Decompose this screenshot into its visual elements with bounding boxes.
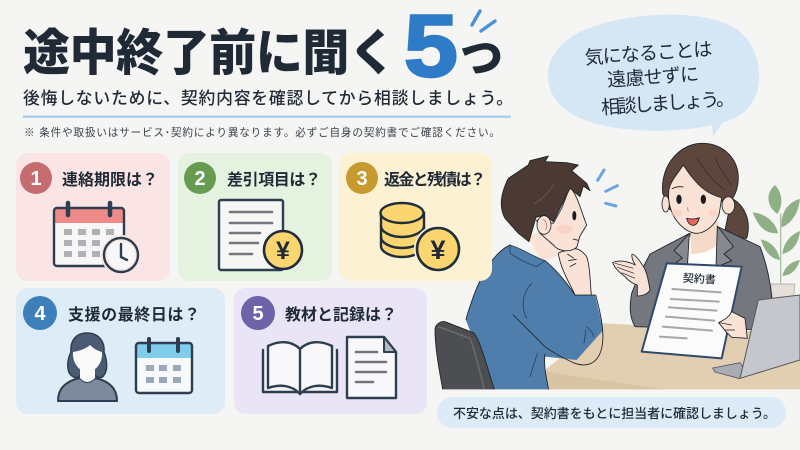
panel: 4 support last day (16, 288, 225, 414)
icon: document with yen: ¥ (276, 237, 290, 265)
panel: 1 contact deadline (16, 153, 170, 281)
badge 1 (20, 162, 52, 194)
man (466, 156, 603, 393)
badge 2: 2 (194, 168, 206, 190)
clipboard: 契約書 (683, 271, 716, 287)
heading 5: 教材と記録は？ (285, 305, 397, 324)
chair (435, 322, 496, 393)
panel: 3 refund and balance (339, 153, 492, 281)
bubble text (584, 37, 736, 120)
bubble text: 相談しましょう。 (600, 88, 736, 119)
table (545, 323, 800, 389)
icon: calendar with clock (54, 203, 138, 272)
icon: coins with yen: ¥ (430, 235, 446, 265)
bubble text: 気になることは (584, 38, 713, 69)
plant (753, 185, 800, 300)
heading 2: 差引項目は？ (227, 170, 321, 189)
badge 3: 3 (356, 168, 368, 190)
badge 3 (346, 162, 378, 194)
panel: 2 deductions (178, 153, 332, 281)
bottom callout: 不安な点は、契約書をもとに担当者に確認しましょう。 (453, 406, 776, 421)
woman (630, 143, 775, 330)
icon: calendar (136, 339, 192, 393)
badge 5: 5 (252, 303, 264, 325)
title: 途中終了前に聞く (23, 26, 396, 81)
badge 5 (241, 296, 275, 330)
panel: 5 materials and records (234, 288, 427, 414)
icon: document with yen (219, 200, 302, 270)
bubble text: 遠慮せずに (607, 63, 700, 92)
sparkle marks (472, 11, 495, 31)
subtitle: 後悔しないために、契約内容を確認してから相談しましょう。 (23, 89, 513, 108)
disclaimer note: ※ 条件や取扱いはサービス･契約により異なります。必ずご自身の契約書でご確認ください。 (24, 126, 500, 139)
heading 3: 返金と残債は？ (384, 170, 486, 189)
bottom callout (437, 397, 786, 428)
title (23, 0, 503, 95)
icon: document (347, 337, 396, 398)
clipboard (642, 263, 742, 358)
badge 1: 1 (30, 168, 42, 190)
illustration: consultation scene (435, 143, 800, 393)
heading 1: 連絡期限は？ (62, 170, 158, 189)
woman lower hand (719, 312, 747, 338)
speech bubble (548, 15, 759, 137)
thinking marks (598, 170, 617, 206)
badge 2 (184, 162, 216, 194)
icon: coins with yen (380, 203, 462, 273)
icon: open book (263, 342, 337, 394)
badge 4: 4 (34, 303, 46, 325)
laptop (713, 295, 800, 379)
icon: person (58, 333, 117, 401)
woman hand (613, 254, 650, 296)
badge 4 (23, 296, 57, 330)
heading 4: 支援の最終日は？ (68, 305, 200, 324)
title: つ (460, 35, 503, 83)
